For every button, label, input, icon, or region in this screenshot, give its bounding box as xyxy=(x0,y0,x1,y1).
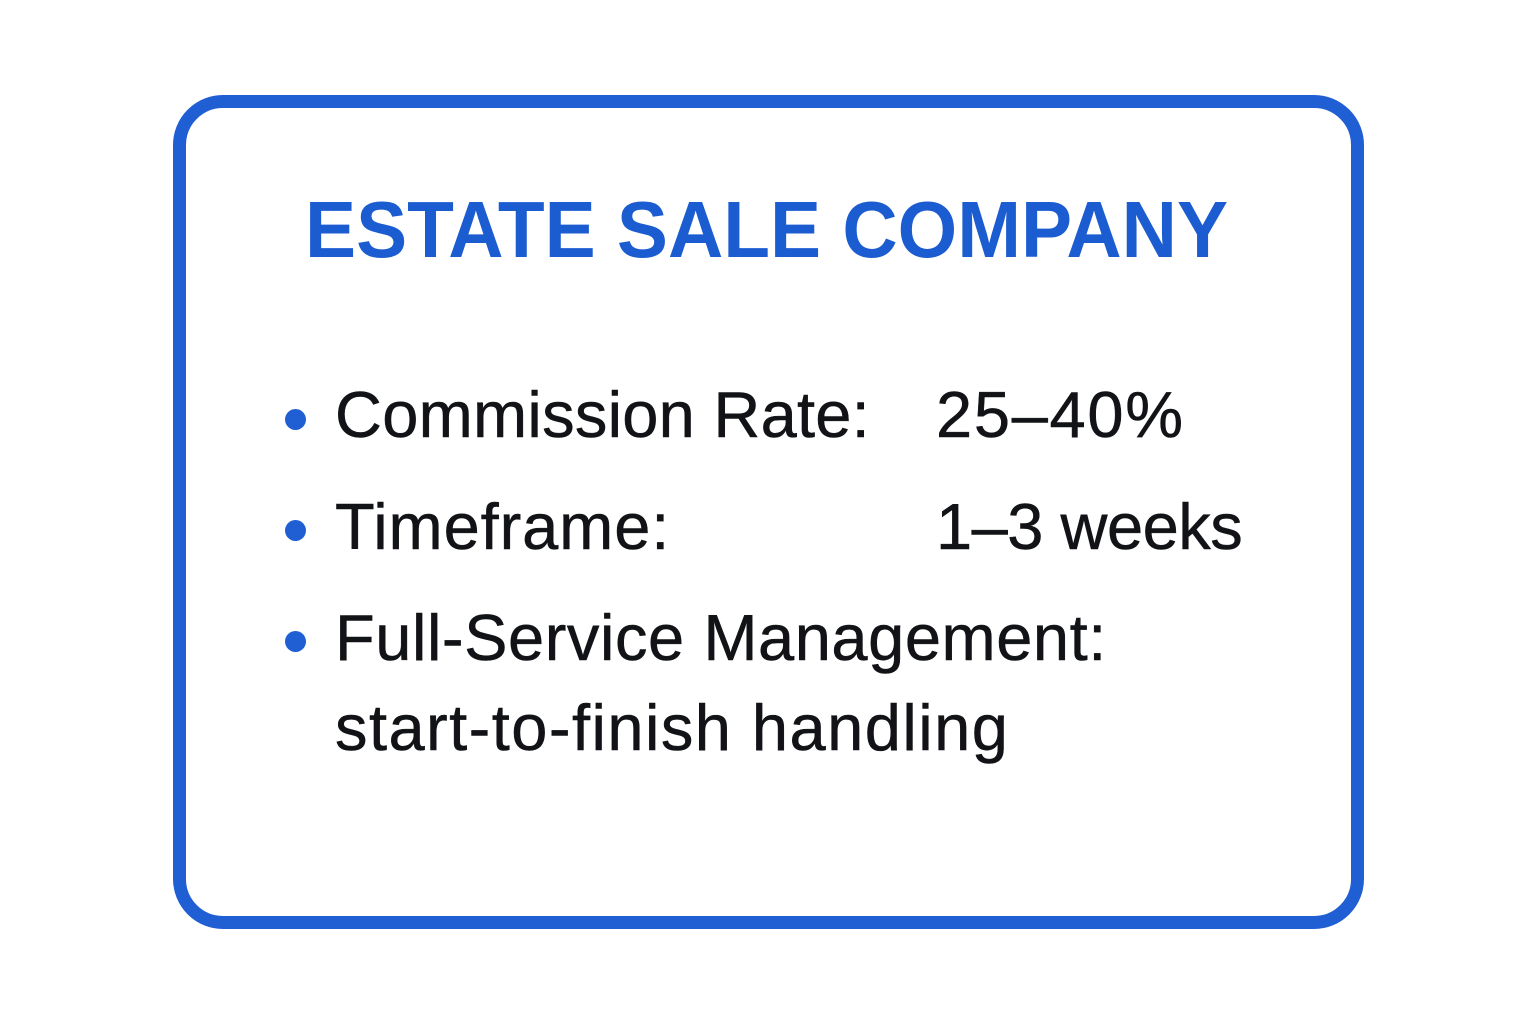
title: ESTATE SALE COMPANY xyxy=(305,185,1228,274)
value: timeframe: 1–3 weeks xyxy=(936,490,1242,563)
value: commission rate: 25–40% xyxy=(936,378,1185,451)
bullet: commission xyxy=(285,409,306,430)
bullet: full-service xyxy=(285,631,306,652)
label: full-service management: Full-Service Management: xyxy=(335,601,1107,674)
label: timeframe: Timeframe: xyxy=(335,490,670,563)
label: commission rate: Commission Rate: xyxy=(335,378,870,451)
panel: estate sale company card xyxy=(173,95,1364,929)
text: start-to-finish handling: start-to-finish handling xyxy=(335,691,1009,764)
bullet: timeframe xyxy=(285,520,306,541)
